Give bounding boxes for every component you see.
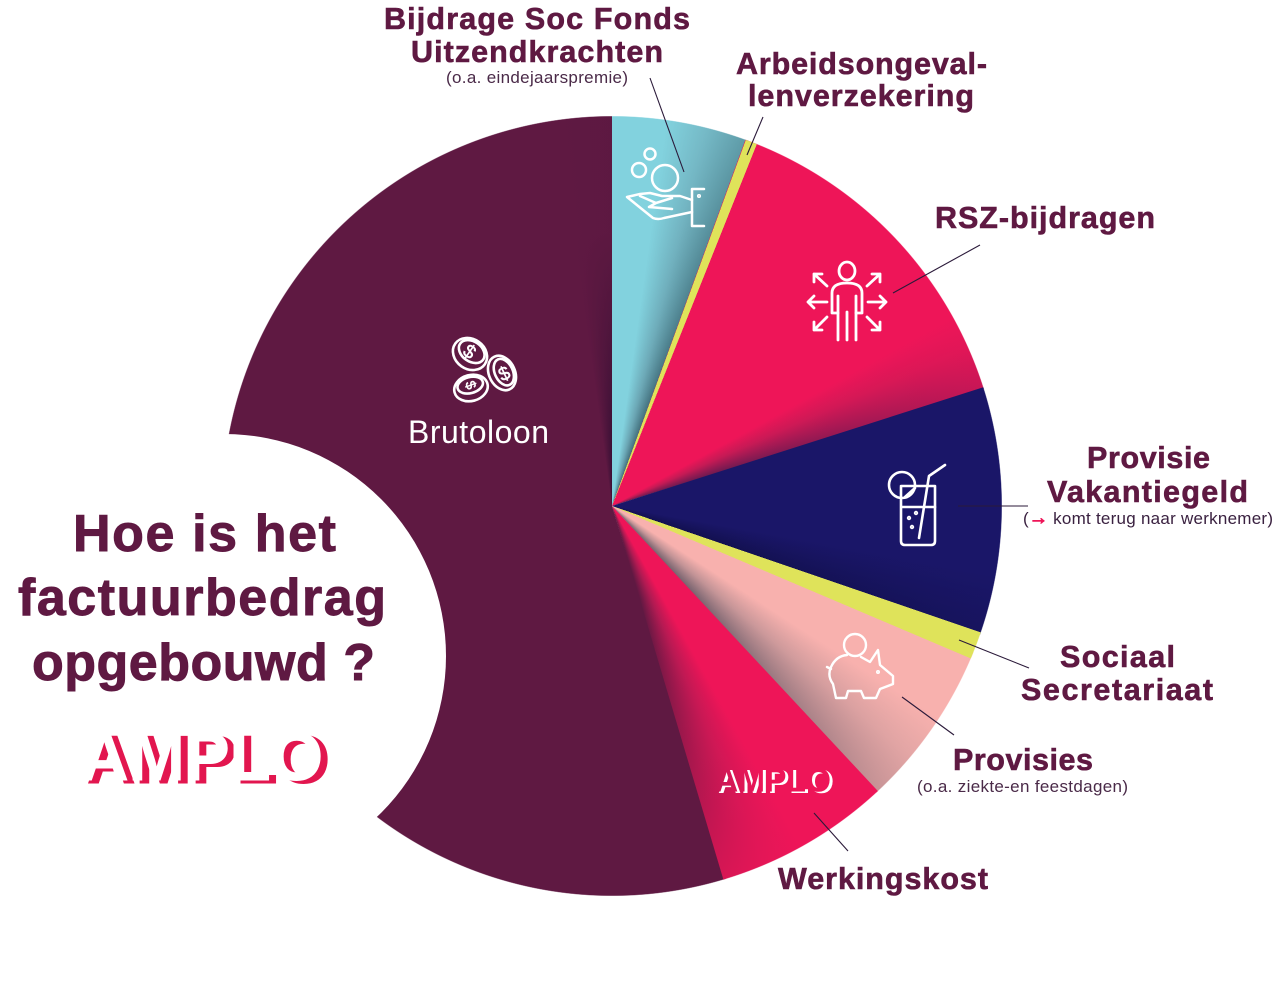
pie slice: Provisie Vakantiegeld xyxy=(612,384,1004,644)
label: Provisie Vakantiegeld: Provisie xyxy=(1087,441,1210,475)
label: Sociaal Secretariaat: Sociaal xyxy=(1060,640,1175,674)
pie slice: Brutoloon xyxy=(222,116,732,896)
label: Bijdrage Soc Fonds xyxy=(384,2,690,87)
pie slice: Provisies xyxy=(612,506,978,796)
label: Werkingskost: Werkingskost xyxy=(778,862,988,896)
icon: drink glass xyxy=(889,465,945,545)
label: Sociaal Secretariaat: Secretariaat xyxy=(1021,673,1213,707)
icon: coins: $ xyxy=(459,341,480,364)
icon: coins: $ xyxy=(462,379,480,392)
icon: hand with bubbles xyxy=(627,148,704,226)
icon: coins: $ xyxy=(495,362,514,386)
label: Arbeidsongevallenverzekering: lenverzekering xyxy=(748,79,974,113)
pie slice: Arbeidsongevallenverzekering xyxy=(613,140,757,503)
label: Provisie Vakantiegeld: (→ komt terug naar werknemer) xyxy=(1023,508,1273,529)
label: Bijdrage Soc Fonds: Uitzendkrachten xyxy=(411,35,663,69)
label: Arbeidsongevallenverzekering xyxy=(736,47,987,113)
pie slice: Werkingskost xyxy=(612,506,884,886)
label: Provisie Vakantiegeld: Vakantiegeld xyxy=(1047,475,1248,509)
label: Bijdrage Soc Fonds: (o.a. eindejaarspremie) xyxy=(446,68,628,87)
white circular cut-out behind title xyxy=(2,434,446,878)
leader lines xyxy=(650,78,1029,851)
label: Sociaal Secretariaat xyxy=(1021,640,1213,707)
label: Provisies: (o.a. ziekte-en feestdagen) xyxy=(917,777,1128,796)
label: Provisies: Provisies xyxy=(953,743,1093,777)
title xyxy=(18,505,386,692)
pie slice: RSZ-bijdragen xyxy=(612,116,987,508)
logo: AMPLO large: AMPLO xyxy=(87,722,330,798)
pie slice: Bijdrage Soc Fonds xyxy=(612,116,762,506)
title: Hoe is het xyxy=(73,505,336,563)
label: Provisies xyxy=(917,743,1128,796)
title: opgebouwd ? xyxy=(32,634,375,692)
label: Bijdrage Soc Fonds: Bijdrage Soc Fonds xyxy=(384,2,690,36)
icon: piggy bank xyxy=(827,634,893,698)
pie slice: Sociaal Secretariaat xyxy=(612,506,984,666)
label: RSZ-bijdragen: RSZ-bijdragen xyxy=(935,201,1155,235)
icon: person with arrows xyxy=(808,262,886,340)
label: Arbeidsongevallenverzekering: Arbeidsongeval- xyxy=(736,47,987,81)
label: Brutoloon: Brutoloon xyxy=(408,414,549,450)
title: factuurbedrag xyxy=(18,569,386,627)
label: Provisie Vakantiegeld xyxy=(1023,441,1273,529)
icon: coins xyxy=(447,331,521,405)
logo: AMPLO small in slice: AMPLO xyxy=(718,763,834,800)
